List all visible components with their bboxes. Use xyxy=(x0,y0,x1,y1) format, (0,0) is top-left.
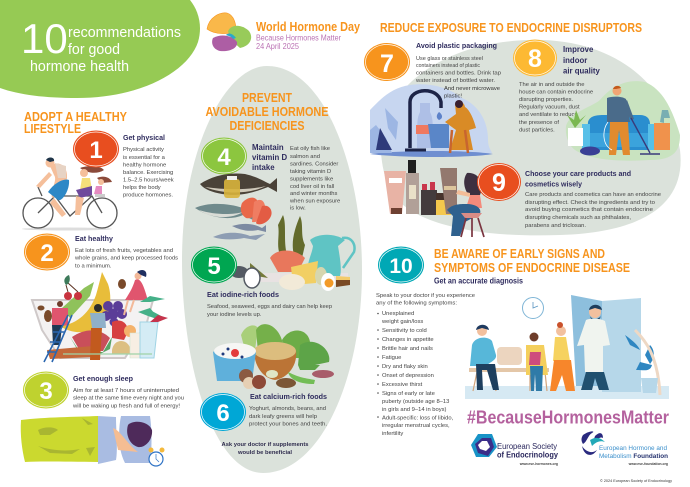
text: get physical xyxy=(123,133,174,198)
text: improve indoor air quality: Regularly vacuum, dust xyxy=(519,104,580,110)
text: eat iodine-rich foods: Eat iodine-rich foods xyxy=(207,290,279,299)
text: get physical: healthy hormone xyxy=(123,162,166,168)
logo: european hormone and metabolism foundation: European Hormone and xyxy=(599,445,667,452)
title: hormone health xyxy=(30,59,129,75)
text: symptoms list: Speak to your doctor if you experience xyxy=(376,293,475,299)
text: improve indoor air quality: the presence of xyxy=(519,120,559,126)
text: maintain vitamin d intake: Maintain xyxy=(252,143,284,152)
text: eat iodine-rich foods: your iodine levels up. xyxy=(207,312,262,318)
text: symptoms list: any of the following symptoms: xyxy=(376,300,457,306)
badge 1: 1 xyxy=(89,137,103,164)
heading: be aware of early signs xyxy=(434,247,630,286)
text: get enough sleep: Aim for at least 7 hours of uninterrupted xyxy=(73,388,179,394)
badge 3: 3 xyxy=(39,378,53,405)
note: ask your doctor: Ask your doctor if supplements xyxy=(222,442,308,448)
text: eat calcium-rich foods xyxy=(249,392,327,428)
text: improve indoor air quality: dust particles. xyxy=(519,128,555,134)
heading: be aware of early signs: BE AWARE OF EARLY SIGNS AND xyxy=(434,247,605,261)
heading: adopt a healthy lifestyle xyxy=(24,110,128,136)
heading: reduce exposure: REDUCE EXPOSURE TO ENDOCRINE DISRUPTORS xyxy=(380,21,642,35)
text: avoid plastic packaging xyxy=(415,41,501,100)
text: symptoms list: weight gain/loss xyxy=(381,319,423,325)
logo: world hormone day: Because Hormones Matter xyxy=(256,34,341,42)
text: symptoms list: puberty (outside age 8–13 xyxy=(382,399,449,405)
text: improve indoor air quality: The air in and outside the xyxy=(519,82,584,88)
illustration: calcium-rich foods xyxy=(213,324,334,389)
badge 6: 6 xyxy=(216,400,230,427)
text: symptoms list: irregular menstrual cycles, xyxy=(382,423,450,429)
badge 4: 4 xyxy=(217,144,231,171)
logo: european society of endocrinology xyxy=(471,434,559,466)
subheading: Get an accurate diagnosis xyxy=(434,276,524,286)
text: improve indoor air quality: air quality xyxy=(563,66,600,76)
logo: european hormone and metabolism foundation xyxy=(582,431,668,466)
badge 5: 5 xyxy=(207,253,221,280)
text: get physical: Get physical xyxy=(123,133,165,142)
text: get physical: Physical activity xyxy=(123,147,164,153)
text: avoid plastic packaging: plastic! xyxy=(444,94,462,100)
text: choose care products: disrupting effect. Check the ingredients and try to xyxy=(525,200,655,206)
illustration: seaweed, dairy and eggs xyxy=(230,215,354,291)
text: choose care products: cosmetics wisely xyxy=(525,180,583,188)
heading: prevent avoidable hormone deficiencies: AVOIDABLE HORMONE xyxy=(206,105,328,119)
logo: european hormone and metabolism foundation: Metabolism Foundation xyxy=(599,453,668,460)
badge 2 xyxy=(24,234,70,270)
text: eat healthy: to a minimum. xyxy=(75,264,112,270)
badge 8 xyxy=(513,40,557,76)
logo: european hormone and metabolism foundation: www.ese-foundation.org xyxy=(628,462,668,466)
text: choose care products xyxy=(525,169,661,229)
copyright: © 2024 European Society of Endocrinology xyxy=(600,479,672,483)
hashtag: #BecauseHormonesMatter xyxy=(467,408,669,428)
heading: adopt a healthy lifestyle: ADOPT A HEALTHY xyxy=(24,110,128,124)
logo: world hormone day xyxy=(207,13,360,51)
text: maintain vitamin d intake xyxy=(252,143,340,212)
text: symptoms list: infertility xyxy=(382,431,403,437)
text: choose care products: parabens and triclosan. xyxy=(525,223,586,229)
title: recommendations xyxy=(68,25,181,41)
title: for good xyxy=(68,42,120,58)
illustration: giant fruit bowl xyxy=(32,270,168,362)
text: maintain vitamin d intake: taking vitamin D xyxy=(290,169,331,175)
note: ask your doctor xyxy=(222,442,308,456)
title xyxy=(21,15,181,75)
text: avoid plastic packaging: And never microwave xyxy=(444,86,500,92)
illustration: oily fish and cod liver oil xyxy=(195,173,277,240)
text: symptoms list: Onset of depression xyxy=(382,373,434,379)
text: eat calcium-rich foods: protect your bones and teeth. xyxy=(249,422,327,428)
text: maintain vitamin d intake: vitamin D xyxy=(252,153,287,162)
logo: world hormone day: 24 April 2025 xyxy=(256,42,300,51)
text: get enough sleep xyxy=(72,374,184,410)
text: eat healthy: whole grains, and keep processed foods xyxy=(74,256,178,262)
text: get physical: 1.5–2.5 hours/week xyxy=(123,178,174,184)
text: improve indoor air quality: indoor xyxy=(563,56,587,65)
badge 10 xyxy=(378,246,424,284)
text: avoid plastic packaging: water instead of bottled water. xyxy=(415,78,495,84)
text: eat iodine-rich foods xyxy=(207,290,332,318)
text: eat healthy: Eat lots of fresh fruits, vegetables and xyxy=(75,248,173,254)
panel: green title blob xyxy=(0,0,200,98)
illustration: woman with cosmetics xyxy=(384,160,484,237)
badge 1 xyxy=(73,130,119,168)
text: get enough sleep: will be waking up fresh and full of energy! xyxy=(72,404,180,410)
text: improve indoor air quality xyxy=(519,45,600,134)
text: improve indoor air quality: disrupting properties. xyxy=(519,97,574,103)
illustration: man vacuuming by a sofa xyxy=(566,81,680,161)
text: symptoms list: Dry and flaky skin xyxy=(382,364,428,370)
illustration: doctor's waiting room xyxy=(465,295,669,399)
text: symptoms list: in girls and 9–14 in boys) xyxy=(382,407,447,413)
text: maintain vitamin d intake: intake xyxy=(252,163,275,172)
badge 5 xyxy=(191,246,237,284)
text: choose care products: Care products and cosmetics can have an endocrine xyxy=(525,192,661,198)
text: maintain vitamin d intake: when sun exposure xyxy=(289,198,340,204)
text: maintain vitamin d intake: salmon and xyxy=(290,154,320,160)
heading: prevent avoidable hormone deficiencies: PREVENT xyxy=(242,91,292,105)
text: eat healthy: Eat healthy xyxy=(75,234,114,243)
text: eat iodine-rich foods: Seafood, seaweed, eggs and dairy can help keep xyxy=(207,304,332,310)
heading: be aware of early signs: SYMPTOMS OF ENDOCRINE DISEASE xyxy=(434,261,630,275)
text: symptoms list: Signs of early or late xyxy=(382,391,435,397)
text: get enough sleep: sleep at the same time every night and you xyxy=(73,396,184,402)
logo: european society of endocrinology: www.ese-hormones.org xyxy=(519,462,558,466)
text: maintain vitamin d intake: is low. xyxy=(290,206,306,212)
text: symptoms list: Changes in appetite xyxy=(382,337,434,343)
text: maintain vitamin d intake: Eat oily fish like xyxy=(290,146,330,152)
badge 3 xyxy=(23,372,69,408)
panel: central grey blob xyxy=(182,66,362,473)
text: get physical: helps the body xyxy=(123,185,161,191)
text: eat calcium-rich foods: Yoghurt, almonds, beans, and xyxy=(249,406,326,412)
badge 4 xyxy=(201,138,247,174)
badge 8: 8 xyxy=(528,45,542,73)
text: symptoms list: Excessive thirst xyxy=(382,382,423,388)
illustration: family on tandem bike xyxy=(22,157,117,230)
text: improve indoor air quality: Improve xyxy=(563,45,594,54)
text: improve indoor air quality: house can contain endocrine xyxy=(519,90,593,96)
text: eat calcium-rich foods: dark leafy greens will help xyxy=(249,414,317,420)
text: symptoms list xyxy=(376,293,475,437)
badge 10: 10 xyxy=(389,255,413,278)
text: maintain vitamin d intake: supplements like xyxy=(290,176,333,182)
text: improve indoor air quality: and ventilate to reduce xyxy=(519,112,578,118)
illustration: tap, bottle, woman filling a jug xyxy=(370,84,493,157)
badge 7: 7 xyxy=(380,50,394,78)
text: eat calcium-rich foods: Eat calcium-rich foods xyxy=(250,392,327,401)
badge 6 xyxy=(200,393,246,431)
badge 2: 2 xyxy=(40,240,54,267)
text: choose care products: disrupting chemicals such as phthalates, xyxy=(525,215,631,221)
logo: european society of endocrinology: of Endocrinology xyxy=(497,450,559,460)
text: choose care products: Choose your care products and xyxy=(525,169,631,178)
illustration: person sleeping with alarm clock xyxy=(21,416,165,466)
text: symptoms list: Sensitivity to cold xyxy=(382,328,427,334)
text: choose care products: avoid buying cosmetics that contain endocrine xyxy=(525,207,653,213)
badge 9: 9 xyxy=(492,169,506,197)
text: eat healthy xyxy=(74,234,178,270)
panel: right grey blob xyxy=(381,40,681,235)
title: 10 xyxy=(21,15,68,62)
text: get physical: produce hormones. xyxy=(123,192,173,198)
text: avoid plastic packaging: Avoid plastic packaging xyxy=(416,41,497,50)
heading: prevent avoidable hormone deficiencies: DEFICIENCIES xyxy=(230,119,304,133)
logo: european society of endocrinology: European Society xyxy=(497,442,557,451)
badge 7 xyxy=(364,43,410,81)
heading: prevent avoidable hormone deficiencies xyxy=(206,91,328,133)
text: maintain vitamin d intake: sardines. Consider xyxy=(290,162,338,168)
text: avoid plastic packaging: Use glass or stainless steel xyxy=(416,56,483,62)
text: get physical: is essential for a xyxy=(123,155,166,161)
text: maintain vitamin d intake: cod liver oil in fall xyxy=(290,184,334,190)
text: avoid plastic packaging: containers instead of plastic xyxy=(416,63,480,69)
text: symptoms list: Fatigue xyxy=(382,355,401,361)
badge 9 xyxy=(477,163,521,201)
text: maintain vitamin d intake: and winter months xyxy=(290,191,337,197)
text: avoid plastic packaging: containers and bottles. Drink tap xyxy=(416,70,501,76)
logo: world hormone day: World Hormone Day xyxy=(256,20,360,34)
text: symptoms list: Unexplained xyxy=(382,311,414,317)
text: symptoms list: Brittle hair and nails xyxy=(382,346,433,352)
text: get physical: balance. Exercising xyxy=(123,170,173,176)
text: get enough sleep: Get enough sleep xyxy=(73,374,133,383)
note: ask your doctor: would be beneficial xyxy=(237,450,292,456)
heading: adopt a healthy lifestyle: LIFESTYLE xyxy=(24,122,81,136)
text: symptoms list: Adult-specific: loss of libido, xyxy=(382,416,454,422)
